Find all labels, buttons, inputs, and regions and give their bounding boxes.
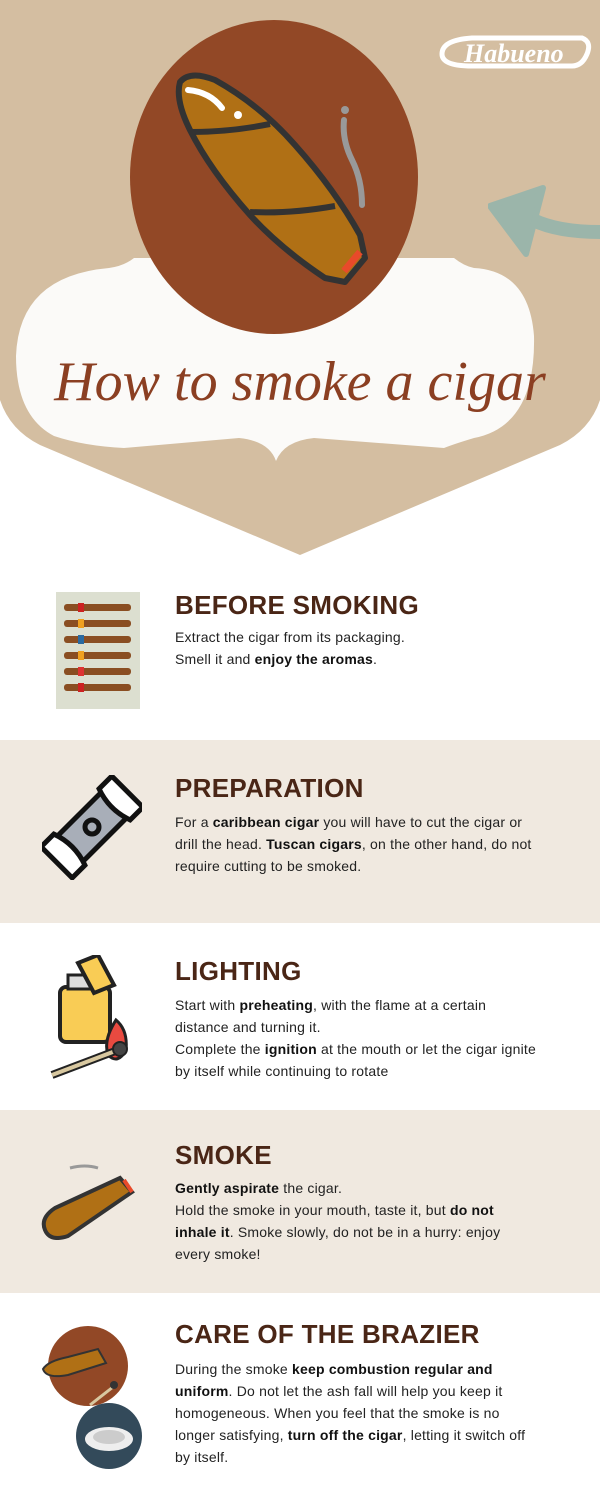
heading: SMOKE <box>175 1140 272 1170</box>
icon: cigar box <box>56 592 140 709</box>
icon: lighter and match <box>50 955 128 1079</box>
heading: BEFORE SMOKING <box>175 590 419 620</box>
text: During the smoke keep combustion regular and uniform. Do not let the ash fall will help you keep it homogeneous. When you feel that the smoke is no longer satisfying, turn off the cigar, letting it switch off by itself. <box>175 1361 525 1465</box>
icon: cigar <box>42 1164 135 1240</box>
heading: PREPARATION <box>175 773 364 803</box>
header background <box>0 0 600 555</box>
title: How to smoke a cigar <box>54 351 546 413</box>
section: before smoking <box>56 590 419 709</box>
logo: Habueno <box>440 36 592 68</box>
section: lighting <box>50 955 536 1079</box>
text: For a caribbean cigar you will have to cut the cigar or drill the head. Tuscan cigars, on the other hand, do not require cutting to be smoked. <box>175 814 532 874</box>
section: smoke <box>0 1110 600 1293</box>
hero icon: cigar in circle <box>130 20 418 334</box>
heading: LIGHTING <box>175 956 302 986</box>
text <box>175 629 405 667</box>
heading: CARE OF THE BRAZIER <box>175 1319 480 1349</box>
section: care of the brazier <box>42 1319 526 1469</box>
text: Smell it and enjoy the aromas. <box>175 651 377 667</box>
logo: Habueno: Habueno <box>463 39 564 68</box>
text: Gently aspirate the cigar. <box>175 1180 342 1196</box>
icon: cutter <box>42 775 142 880</box>
text: Start with preheating, with the flame at a certain distance and turning it. <box>175 997 486 1035</box>
text: Hold the smoke in your mouth, taste it, but do not inhale it. Smoke slowly, do not be in a hurry: enjoy every smoke! <box>175 1202 500 1262</box>
text: Complete the ignition at the mouth or let the cigar ignite by itself while continuing to rotate <box>175 1041 536 1079</box>
icon: cigar circle and ashtray <box>42 1326 142 1469</box>
text <box>175 997 536 1079</box>
text: Extract the cigar from its packaging. <box>175 629 405 645</box>
section: preparation <box>0 740 600 923</box>
arrow icon <box>488 185 600 257</box>
cloud banner <box>16 258 534 461</box>
